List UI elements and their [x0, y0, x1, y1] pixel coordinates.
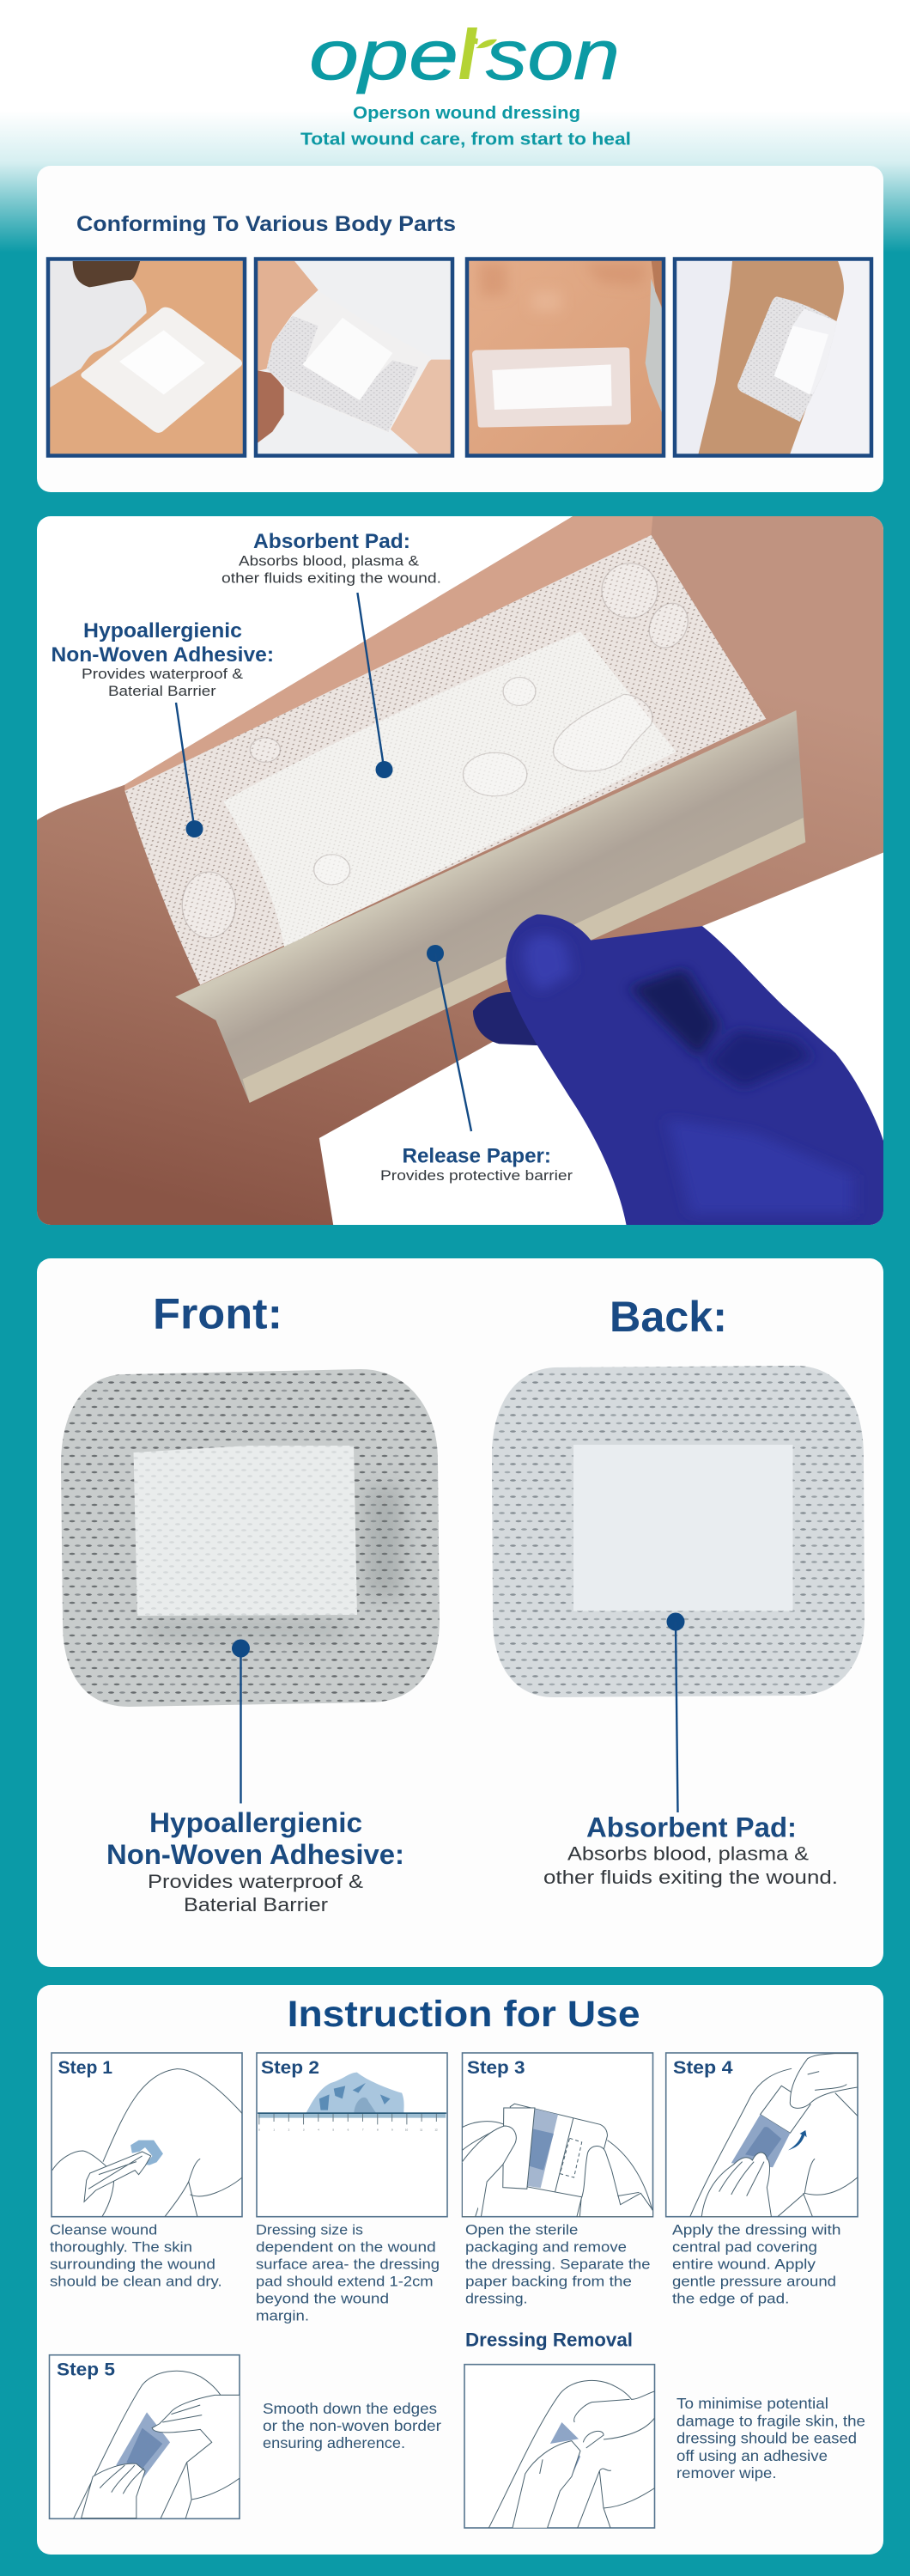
step 3 text: paper backing from the [465, 2274, 632, 2290]
illustration: measuring wound with ruler: 10 [405, 2128, 409, 2131]
logo: operson: son [486, 16, 620, 94]
step 5 label: Step 5 [57, 2360, 115, 2380]
callout: absorbent pad [221, 530, 441, 778]
dressing removal text: dressing should be eased [676, 2430, 857, 2447]
photo: dressing applied on arm with gloved hand [35, 515, 888, 1227]
step 5 [50, 2355, 441, 2518]
step 1 text: should be clean and dry. [50, 2274, 222, 2290]
step 3 text [465, 2222, 651, 2307]
logo: operson [309, 10, 620, 95]
step 1 [50, 2053, 242, 2290]
dressing removal text: To minimise potential [676, 2395, 828, 2412]
step 1 label: Step 1 [58, 2058, 112, 2078]
callout: hypoallergenic adhesive: Non-Woven Adhesive: [52, 643, 274, 667]
step 2 text: margin. [256, 2308, 309, 2324]
callout: hypoallergenic adhesive: Hypoallergienic [83, 619, 242, 642]
panel: conforming to various body parts [37, 166, 883, 492]
callout: release paper: Provides protective barrier [380, 1167, 573, 1184]
photo: dressing on arm [255, 259, 452, 455]
tagline: Operson wound dressing [353, 104, 580, 123]
step 1 text: Cleanse wound [50, 2222, 157, 2238]
step 3 text: dressing. [465, 2291, 527, 2307]
callout: hypoallergenic adhesive: Baterial Barrier [108, 683, 216, 699]
illustration: measuring wound with ruler: 12 [434, 2128, 438, 2131]
heading: back: Back: [610, 1293, 727, 1341]
header: logo and tagline [300, 10, 631, 149]
step 5 text: ensuring adherence. [263, 2434, 405, 2451]
step 3 label: Step 3 [467, 2058, 525, 2078]
callout: hypoallergenic adhesive: Baterial Barrier [184, 1894, 329, 1915]
image: back of dressing [492, 1366, 864, 1697]
illustration: measuring wound with ruler: 6 [348, 2128, 349, 2131]
illustration: measuring wound with ruler: 0 [258, 2128, 260, 2131]
callout: hypoallergenic adhesive [106, 1639, 404, 1915]
step 1 text [50, 2222, 222, 2290]
callout: absorbent pad: Absorbs blood, plasma & [567, 1843, 809, 1865]
step 3 text: packaging and remove [465, 2239, 627, 2256]
illustration: measuring wound with ruler: 11 [420, 2128, 423, 2131]
step 4 text: gentle pressure around [672, 2274, 836, 2290]
panel: product anatomy on arm [35, 515, 888, 1227]
callout: hypoallergenic adhesive [52, 619, 274, 837]
logo: operson: r [460, 10, 478, 95]
step 4 text [672, 2222, 841, 2307]
step 2 text: dependent on the wound [256, 2239, 436, 2256]
image: front of dressing [61, 1369, 440, 1707]
step 5 text [263, 2400, 441, 2451]
illustration: applying dressing [666, 2053, 858, 2217]
panel: front and back [37, 1258, 883, 1967]
illustration: smoothing edges [50, 2355, 240, 2518]
illustration: opening dressing [462, 2053, 653, 2217]
step 3 [462, 2053, 653, 2307]
step 5 text: or the non-woven border [263, 2417, 441, 2434]
heading: instruction for use: Instruction for Use [288, 1994, 640, 2035]
step 1 text: thoroughly. The skin [50, 2239, 192, 2256]
back dressing [492, 1293, 864, 1888]
dressing removal text: off using an adhesive [676, 2447, 828, 2464]
dressing removal text: damage to fragile skin, the [676, 2413, 865, 2430]
illustration: cleansing wound [52, 2053, 242, 2217]
callout: hypoallergenic adhesive: Provides waterproof & [148, 1871, 363, 1892]
photo: dressing on lower back [467, 259, 664, 455]
callout: absorbent pad: Absorbent Pad: [586, 1812, 797, 1843]
callout: release paper: Release Paper: [402, 1144, 551, 1168]
step 4 text: the edge of pad. [672, 2291, 789, 2307]
step 1 text: surrounding the wound [50, 2256, 215, 2273]
step 2 text [256, 2222, 440, 2324]
step 4 label: Step 4 [673, 2058, 733, 2078]
callout: absorbent pad: other fluids exiting the wound. [543, 1867, 838, 1888]
heading: front: Front: [153, 1290, 282, 1338]
logo: operson: ope [309, 16, 458, 94]
illustration: measuring wound with ruler: 9 [391, 2128, 393, 2131]
photo: dressing on forearm [675, 259, 873, 455]
illustration: measuring wound with ruler [257, 2053, 447, 2217]
illustration: measuring wound with ruler: 7 [362, 2128, 364, 2131]
step 4 text: entire wound. Apply [672, 2256, 816, 2273]
step 4 [666, 2053, 858, 2307]
tagline [300, 104, 631, 149]
step 3 text: the dressing. Separate the [465, 2256, 651, 2273]
callout: absorbent pad: other fluids exiting the wound. [221, 569, 441, 586]
step 2 [256, 2053, 447, 2324]
illustration: measuring wound with ruler: 3 [303, 2128, 305, 2131]
photo: dressing on shoulder [48, 259, 246, 455]
callout: absorbent pad: Absorbs blood, plasma & [239, 553, 420, 569]
callout: absorbent pad: Absorbent Pad: [253, 530, 410, 553]
step 3 text: Open the sterile [465, 2222, 578, 2238]
panel: instruction for use [37, 1985, 883, 2555]
step 2 text: Dressing size is [256, 2222, 363, 2238]
callout: absorbent pad [543, 1613, 838, 1888]
step 2 text: pad should extend 1-2cm [256, 2274, 434, 2290]
step 2 label: Step 2 [261, 2058, 319, 2078]
step 4 text: central pad covering [672, 2239, 817, 2256]
illustration: measuring wound with ruler: 1 [273, 2128, 275, 2131]
step 2 text: surface area- the dressing [256, 2256, 440, 2273]
callout: hypoallergenic adhesive: Hypoallergienic [149, 1807, 362, 1838]
tagline: Total wound care, from start to heal [300, 131, 631, 149]
illustration: measuring wound with ruler: 5 [332, 2128, 334, 2131]
callout: hypoallergenic adhesive: Provides waterproof & [82, 666, 244, 682]
dressing removal text: remover wipe. [676, 2464, 776, 2482]
heading: conforming: Conforming To Various Body Parts [76, 212, 456, 236]
heading: dressing removal: Dressing Removal [465, 2329, 633, 2351]
callout: release paper [380, 945, 573, 1184]
step 2 text: beyond the wound [256, 2291, 389, 2307]
step 4 text: Apply the dressing with [672, 2222, 841, 2238]
illustration: measuring wound with ruler: 8 [377, 2128, 379, 2131]
illustration: removing dressing [464, 2365, 655, 2528]
step 5 text: Smooth down the edges [263, 2400, 437, 2417]
dressing removal text [676, 2395, 865, 2482]
illustration: measuring wound with ruler: 4 [318, 2128, 319, 2131]
illustration: measuring wound with ruler: 2 [288, 2128, 290, 2131]
front dressing [61, 1290, 440, 1915]
dressing removal [464, 2329, 865, 2528]
callout: hypoallergenic adhesive: Non-Woven Adhesive: [106, 1839, 404, 1870]
